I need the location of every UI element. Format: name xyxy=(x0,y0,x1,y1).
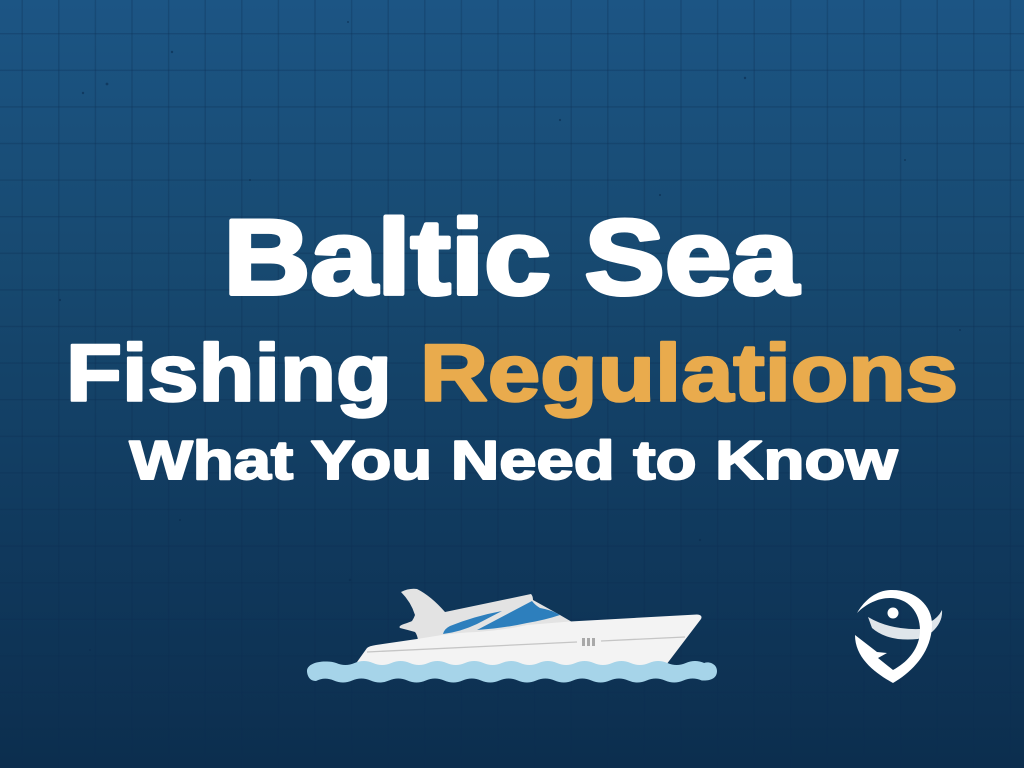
hull stripe xyxy=(367,637,685,652)
icon: motor yacht on water xyxy=(307,589,717,682)
logo tail band xyxy=(868,610,942,640)
heading: Fishing Regulations xyxy=(66,328,958,418)
logo body xyxy=(855,590,932,683)
boat windows xyxy=(443,601,560,634)
heading word: Fishing: Fishing xyxy=(66,328,392,418)
heading word: Regulations: Regulations xyxy=(420,328,958,418)
logo eye xyxy=(888,608,898,618)
boat superstructure xyxy=(400,589,572,640)
boat hull xyxy=(352,614,702,669)
water waves xyxy=(307,661,717,682)
subtitle: What You Need to Know xyxy=(130,429,898,491)
hull vents xyxy=(582,638,595,646)
title: Baltic Sea: Baltic Sea xyxy=(224,197,800,317)
icon: fish hook logo xyxy=(855,590,942,683)
